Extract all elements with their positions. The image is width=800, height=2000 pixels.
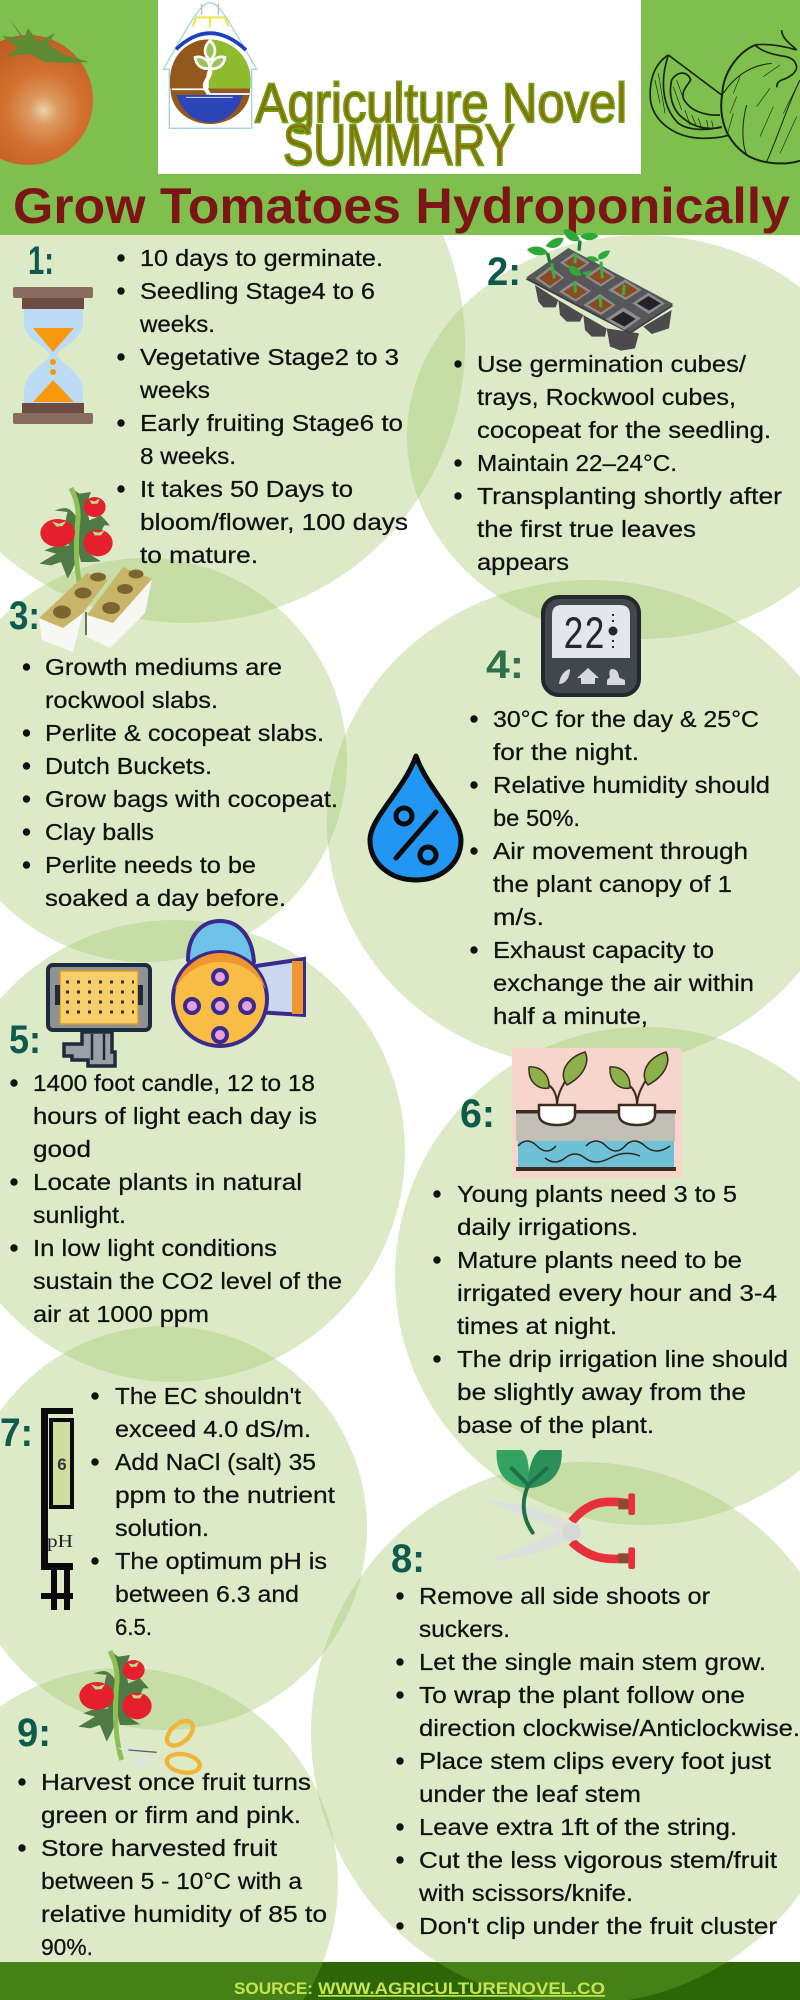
logo text: SUMMARY: SUMMARY [283, 113, 515, 178]
panel 9 text: harvest: green or firm and pink. [41, 1802, 301, 1828]
panel 5 text: lighting: good [33, 1136, 91, 1162]
panel 8 text: pruning: Cut the less vigorous stem/fruit [419, 1847, 778, 1873]
panel 6 text: irrigation: daily irrigations. [457, 1214, 638, 1240]
thermometer reading: 22 [563, 610, 605, 662]
panel 7 text: EC and pH: The EC shouldn't [115, 1383, 302, 1409]
icon: LED panel light [48, 965, 150, 1066]
panel 3 text: growth mediums: rockwool slabs. [45, 687, 218, 713]
panel 2 text: seedling: cocopeat for the seedling. [477, 417, 771, 443]
panel 8 text: pruning: Leave extra 1ft of the string. [419, 1814, 737, 1840]
icon: pruning shears with sprout [488, 1450, 635, 1569]
panel 1 text: growth stages: bloom/flower, 100 days [140, 509, 408, 535]
panel 1 text: growth stages: 10 days to germinate. [140, 245, 383, 271]
icon: grow lamp [173, 921, 304, 1046]
panel 1 text: growth stages: Seedling Stage4 to 6 [140, 278, 375, 304]
icon: tomato photo [0, 17, 93, 165]
panel 2 text: seedling: trays, Rockwool cubes, [477, 384, 736, 410]
panel 1 text: growth stages: to mature. [140, 542, 258, 568]
panel 1 text: growth stages: Vegetative Stage2 to 3 [140, 344, 399, 370]
panel 9 text: harvest [18, 1769, 327, 1960]
panel 7 text: EC and pH: exceed 4.0 dS/m. [115, 1416, 311, 1442]
icon: seedling tray [526, 229, 673, 351]
panel 1 text: growth stages: It takes 50 Days to [140, 476, 353, 502]
panel 6 text: irrigation: be slightly away from the [457, 1379, 746, 1405]
icon: rockwool cubes [39, 567, 152, 652]
panel 8 text: pruning: Let the single main stem grow. [419, 1649, 766, 1675]
panel 6 text: irrigation: irrigated every hour and 3-4 [457, 1280, 777, 1306]
panel 9 text: harvest: Store harvested fruit [41, 1835, 278, 1861]
panel 8 text: pruning: Don't clip under the fruit cluster [419, 1913, 777, 1939]
icon: tomato plant and scissors [78, 1651, 201, 1775]
icon: digital thermometer [543, 597, 639, 695]
source link: WWW.AGRICULTURENOVEL.CO [318, 1979, 605, 1998]
panel 3 text: growth mediums: Grow bags with cocopeat. [45, 786, 338, 812]
panel 5 text: lighting: sunlight. [33, 1202, 126, 1228]
icon: hydroponic channel [512, 1048, 682, 1178]
panel 9 text: harvest: relative humidity of 85 to [41, 1901, 327, 1927]
panel 8 text: pruning: direction clockwise/Anticlockwise. [419, 1715, 800, 1741]
panel 6 text: irrigation [433, 1181, 788, 1438]
panel 2 text: seedling: Transplanting shortly after [477, 483, 782, 509]
panel 1 text: growth stages: weeks [139, 377, 210, 403]
number 3: 3: [9, 594, 40, 638]
circle: section 5 [0, 920, 405, 1382]
pH meter label: pH [47, 1531, 73, 1551]
circle: section 1 [0, 65, 465, 623]
panel 2 text: seedling: the first true leaves [477, 516, 696, 542]
number 8: 8: [391, 1537, 425, 1581]
panel 6 text: irrigation: Young plants need 3 to 5 [457, 1181, 737, 1207]
panel 8 text: pruning: suckers. [419, 1616, 510, 1642]
panel 7 text: EC and pH: ppm to the nutrient [115, 1482, 336, 1508]
panel 5 text: lighting: 1400 foot candle, 12 to 18 [33, 1070, 315, 1096]
circle: section 6 [395, 1027, 800, 1525]
panel 8 text: pruning: Remove all side shoots or [419, 1583, 710, 1609]
panel 5 text: lighting: Locate plants in natural [33, 1169, 302, 1195]
number 2: 2: [487, 250, 521, 294]
panel 3 text: growth mediums: soaked a day before. [45, 885, 286, 911]
number 7: 7: [0, 1411, 33, 1455]
panel 3 text: growth mediums: Perlite needs to be [45, 852, 256, 878]
panel 1 text: growth stages: Early fruiting Stage6 to [140, 410, 403, 436]
panel 3 text: growth mediums: Growth mediums are [45, 654, 282, 680]
panel 4 text: climate: 30°C for the day & 25°C [493, 706, 759, 732]
number 4: 4: [486, 643, 524, 687]
panel 4 text: climate: Air movement through [493, 838, 748, 864]
panel 4 text: climate: be 50%. [493, 805, 580, 831]
panel 6 text: irrigation: times at night. [457, 1313, 617, 1339]
icon: tomato plant [39, 488, 113, 597]
panel 3 text: growth mediums: Perlite & cocopeat slabs. [45, 720, 324, 746]
panel 9 text: harvest: Harvest once fruit turns [41, 1769, 311, 1795]
panel 8 text: pruning: To wrap the plant follow one [419, 1682, 745, 1708]
panel 4 text: climate [470, 706, 770, 1029]
panel 6 text: irrigation: The drip irrigation line should [457, 1346, 788, 1372]
panel 7 text: EC and pH: between 6.3 and [115, 1581, 299, 1607]
icon: humidity water drop [370, 756, 461, 880]
panel 5 text: lighting: In low light conditions [33, 1235, 277, 1261]
panel 1 text: growth stages: 8 weeks. [140, 443, 236, 469]
panel 7 text: EC and pH: 6.5. [115, 1614, 152, 1640]
panel 4 text: climate: exchange the air within [493, 970, 754, 996]
circle: section 7 [0, 1326, 367, 1730]
panel 1 text: growth stages: weeks. [139, 311, 215, 337]
circle: section 2 [407, 235, 800, 639]
panel 8 text: pruning [396, 1583, 800, 1939]
panel 2 text: seedling [454, 351, 782, 575]
panel 7 text: EC and pH: Add NaCl (salt) 35 [115, 1449, 316, 1475]
panel 5 text: lighting: air at 1000 ppm [33, 1301, 209, 1327]
panel 8 text: pruning: Place stem clips every foot just [419, 1748, 772, 1774]
panel 4 text: climate: for the night. [493, 739, 639, 765]
panel 3 text: growth mediums [23, 654, 338, 911]
panel 4 text: climate: m/s. [493, 904, 544, 930]
panel 6 text: irrigation: Mature plants need to be [457, 1247, 742, 1273]
source text: SOURCE: [234, 1979, 313, 1998]
panel 7 text: EC and pH: solution. [115, 1515, 209, 1541]
circle: section 3 [0, 558, 347, 962]
panel 3 text: growth mediums: Dutch Buckets. [45, 753, 212, 779]
circle: section 9 [0, 1668, 338, 2000]
panel 2 text: seedling: Use germination cubes/ [477, 351, 747, 377]
panel 2 text: seedling: appears [477, 549, 569, 575]
logo: greenhouse emblem [163, 3, 257, 128]
number 9: 9: [17, 1711, 51, 1755]
footer [0, 1962, 800, 2000]
panel 2 text: seedling: Maintain 22–24°C. [477, 450, 677, 476]
number 6: 6: [460, 1092, 495, 1136]
panel 8 text: pruning: under the leaf stem [419, 1781, 641, 1807]
panel 4 text: climate: half a minute, [493, 1003, 648, 1029]
circle: section 8 [311, 1462, 800, 2000]
title: Grow Tomatoes Hydroponically [13, 178, 790, 234]
white logo panel [158, 0, 641, 174]
panel 3 text: growth mediums: Clay balls [45, 819, 154, 845]
icon: tomato line art [650, 30, 800, 163]
panel 7 text: EC and pH [91, 1383, 336, 1640]
number 1: 1: [28, 239, 54, 283]
panel 4 text: climate: Exhaust capacity to [493, 937, 714, 963]
icon: hourglass [13, 287, 93, 424]
logo text: Agriculture Novel: Agriculture Novel [255, 71, 627, 134]
panel 5 text: lighting: hours of light each day is [33, 1103, 317, 1129]
header band [0, 0, 800, 235]
panel 9 text: harvest: between 5 - 10°C with a [41, 1868, 302, 1894]
panel 4 text: climate: the plant canopy of 1 [493, 871, 732, 897]
number 5: 5: [9, 1018, 41, 1062]
pH meter digit: 6 [57, 1455, 67, 1474]
panel 4 text: climate: Relative humidity should [493, 772, 770, 798]
panel 6 text: irrigation: base of the plant. [457, 1412, 654, 1438]
panel 5 text: lighting: sustain the CO2 level of the [33, 1268, 342, 1294]
panel 8 text: pruning: with scissors/knife. [418, 1880, 633, 1906]
icon: pH meter [41, 1408, 73, 1610]
panel 7 text: EC and pH: The optimum pH is [115, 1548, 327, 1574]
panel 9 text: harvest: 90%. [41, 1934, 93, 1960]
panel 1 text: growth stages [117, 245, 408, 568]
circle: section 4 [327, 580, 800, 1068]
panel 5 text: lighting [10, 1070, 342, 1327]
